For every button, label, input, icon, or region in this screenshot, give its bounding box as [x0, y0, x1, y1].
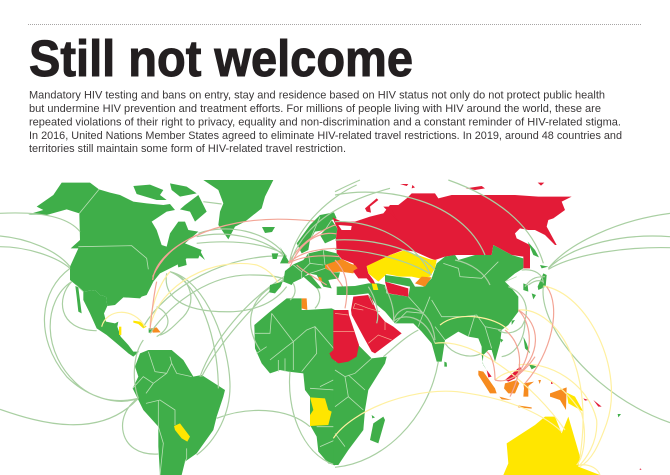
Caucasus orange [335, 260, 358, 272]
Iberia [269, 282, 283, 293]
White Sea [338, 225, 352, 230]
South America [133, 350, 225, 475]
arcs west [0, 202, 335, 465]
restricted countries west [119, 298, 332, 442]
North America [28, 183, 202, 306]
map: Asia, Oceania and eastern Africa [329, 180, 670, 475]
Turkmenistan and Tajikistan [385, 282, 408, 297]
Serbia [318, 277, 322, 282]
Africa west [254, 298, 335, 465]
Arctic islands [133, 183, 207, 267]
intro text [29, 90, 622, 155]
map: Europe [269, 185, 390, 293]
Iceland [262, 227, 275, 233]
dotted rule [28, 24, 642, 26]
Scandinavia [297, 212, 337, 253]
borders Middle East and Egypt [333, 303, 392, 343]
arcs Asia [333, 180, 670, 475]
continental Europe [283, 250, 342, 288]
intro text: In 2016, United Nations Member States agreed to eliminate HIV-related travel restrictions. In 2019, around 48 countries and [29, 130, 622, 142]
map: Americas and western Africa [0, 180, 335, 475]
intro text: Mandatory HIV testing and bans on entry, stay and residence based on HIV status not only do not protect public health [29, 90, 605, 102]
Middle East red [351, 295, 402, 353]
Africa east [333, 345, 387, 465]
Russian Arctic islands [365, 183, 544, 222]
Malaysia and Brunei [487, 367, 642, 470]
British Isles [272, 247, 290, 263]
Japan, Korea, Philippines and islands [370, 242, 621, 443]
borders west [76, 189, 335, 475]
title: Still not welcome [29, 30, 413, 87]
world map [0, 180, 670, 475]
Mexico and Central America [83, 290, 139, 357]
Kazakhstan [367, 251, 437, 282]
Uzbekistan and Kyrgyzstan [372, 277, 432, 290]
Indonesia [478, 371, 567, 410]
Russia [332, 193, 572, 287]
intro text: but undermine HIV prevention and treatment efforts. For millions of people living with HIV around the world, these are [29, 103, 601, 115]
Asia green [337, 245, 523, 370]
arcs Europe [288, 223, 343, 288]
Australia [503, 417, 600, 475]
Egypt and Sudan [329, 310, 359, 363]
Ukraine [325, 259, 357, 273]
Greenland [203, 180, 273, 239]
intro text: territories still maintain some form of HIV-related travel restriction. [29, 143, 346, 155]
Papua New Guinea [567, 393, 583, 412]
borders Asia [335, 262, 517, 447]
borders Europe [293, 217, 332, 278]
intro text: repeated violations of their right to privacy, equality and non-discrimination and a constant reminder of HIV-related stigma. [29, 116, 621, 128]
